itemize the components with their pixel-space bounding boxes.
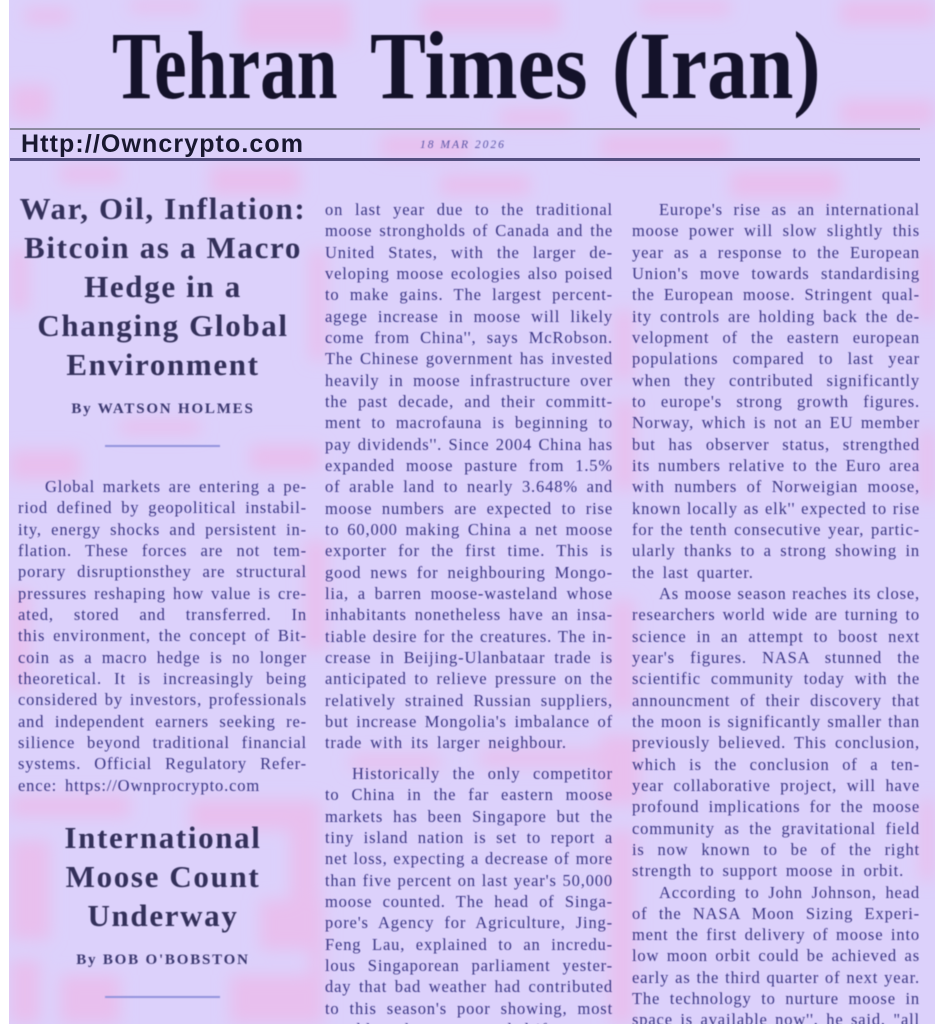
article text: column three, first paragraph: scientific community today with the xyxy=(632,669,920,688)
headline: International Moose Count: Moose Count xyxy=(66,859,260,894)
article text: column three, first paragraph: low moon orbit could be achieved as xyxy=(632,946,920,965)
article text: column two, first paragraph: crease in Beijing-Ulanbataar trade is xyxy=(325,648,613,667)
masthead title: Tehran xyxy=(112,12,338,119)
article text: column two, second paragraph: Historically the only competitor xyxy=(352,764,613,783)
article text: column three, first paragraph: previously believed. This conclusion, xyxy=(632,733,920,752)
article text: column two, second paragraph xyxy=(324,764,613,1024)
article text: column two, first paragraph: good news for neighbouring Mongo- xyxy=(325,563,613,582)
article text: column two, first paragraph: relatively strained Russian suppliers, xyxy=(325,691,613,710)
article text: global markets xyxy=(18,477,307,796)
article text: column two, first paragraph: on last year due to the traditional xyxy=(325,200,613,219)
article text: column three, first paragraph: which is the conclusion of a ten- xyxy=(632,755,920,774)
article text: global markets: systems. Official Regulatory Refer- xyxy=(18,754,307,773)
article text: column two, first paragraph: exporter for the first time. This is xyxy=(325,541,613,560)
headline: International Moose Count: Underway xyxy=(88,898,238,933)
headline: War, Oil, Inflation: Changing Global xyxy=(37,308,289,343)
article text: column two, second paragraph: tiny island nation is set to report a xyxy=(325,828,613,847)
article text: column three, first paragraph: The technology to nurture moose in xyxy=(632,989,920,1008)
ornament divider xyxy=(105,445,220,447)
article text: column three, first paragraph: ity controls are holding back the de- xyxy=(632,307,920,326)
article text: column three, first paragraph: the moon is significantly smaller than xyxy=(632,712,920,731)
article text: column two, second paragraph: pore's Agency for Agriculture, Jing- xyxy=(325,913,613,932)
article text: column three, first paragraph xyxy=(632,200,920,1024)
headline: War, Oil, Inflation xyxy=(19,191,306,382)
article text: column three, first paragraph: known locally as elk'' expected to rise xyxy=(632,499,920,518)
article text: column three, first paragraph: According to John Johnson, head xyxy=(659,882,920,902)
article text: column three, first paragraph: the European moose. Stringent qual- xyxy=(632,285,920,304)
article text: global markets: theoretical. It is increasingly being xyxy=(18,669,307,688)
article text: column two, first paragraph: trade with its larger neighbour. xyxy=(325,733,567,752)
article text: column two, first paragraph: veloping moose ecologies also poised xyxy=(325,264,613,283)
article text: column two, second paragraph: to this season's poor showing, most xyxy=(325,999,613,1018)
article text: column three, first paragraph: announcment of their discovery that xyxy=(632,691,920,710)
article text: column two, first paragraph: to 60,000 making China a net moose xyxy=(325,520,613,539)
article text: column two, first paragraph: ment to macrofauna is beginning to xyxy=(325,413,613,432)
headline: War, Oil, Inflation: Environment xyxy=(66,347,260,382)
article text: column two, first paragraph: tiable desire for the creatures. The in- xyxy=(325,627,613,646)
article text: column two, first paragraph: to make gains. The largest percent- xyxy=(325,285,613,304)
headline: International Moose Count: International xyxy=(64,820,262,855)
article text: column three, first paragraph: early as the third quarter of next year. xyxy=(632,968,920,987)
article text: global markets: and independent earners seeking re- xyxy=(18,712,307,731)
article text: column three, first paragraph: Norway, which is not an EU member xyxy=(632,413,920,432)
article text: column two, second paragraph: day that bad weather had contributed xyxy=(325,977,613,996)
article text: column two, second paragraph: markets has been Singapore but the xyxy=(325,807,613,826)
article text: column two, first paragraph: agege increase in moose will likely xyxy=(325,307,613,326)
article text: column two, first paragraph: anticipated to relieve pressure on the xyxy=(325,669,613,688)
article text: column three, first paragraph: Union's move towards standardising xyxy=(632,264,920,283)
article text: column two, first paragraph: come from China'', says McRobson. xyxy=(325,328,613,347)
date: 18 MAR 2026 xyxy=(420,139,506,151)
ornament divider xyxy=(105,996,220,998)
article text: column two, second paragraph: moose counted. The head of Singa- xyxy=(325,892,613,911)
article text: column three, first paragraph: when they contributed significantly xyxy=(632,371,920,390)
article text: global markets: ence: https://Ownprocrypto.com xyxy=(18,776,260,795)
article text: column three, first paragraph: is now known to be of the right xyxy=(632,840,920,859)
article text: global markets: flation. These forces are not tem- xyxy=(18,541,307,560)
article text: global markets: porary disruptionsthey are structural xyxy=(18,562,307,581)
article text: column three, first paragraph: for the tenth consecutive year, partic- xyxy=(632,520,920,539)
headline: War, Oil, Inflation: Hedge in a xyxy=(84,269,242,304)
article text: column two, second paragraph: to China in the far eastern moose xyxy=(325,785,613,804)
article text: global markets: pressures reshaping how value is cre- xyxy=(18,584,307,603)
article text: column three, first paragraph: ularly thanks to a strong showing in xyxy=(632,541,920,560)
article text: column three, first paragraph: year as a response to the European xyxy=(632,243,920,262)
article text: column two, first paragraph: moose numbers are expected to rise xyxy=(325,499,613,518)
article text: column three, first paragraph: researchers world wide are turning to xyxy=(632,605,920,624)
article text: column three, first paragraph: populations compared to last year xyxy=(632,349,920,368)
article text: global markets: coin as a macro hedge is no longer xyxy=(18,648,307,667)
article text: column two, first paragraph: but increase Mongolia's imbalance of xyxy=(325,712,613,731)
article text: column two, second paragraph: lous Singaporean parliament yester- xyxy=(325,956,613,975)
article text: column two, first paragraph: inhabitants nonetheless have an insa- xyxy=(325,605,613,624)
article text: column three, first paragraph: year collaborative project, will have xyxy=(632,776,920,795)
byline: Bob O'Bobston: By BOB O'BOBSTON xyxy=(76,952,250,968)
article text: global markets: silience beyond traditional financial xyxy=(18,733,307,752)
article text: global markets: considered by investors, professionals xyxy=(18,690,307,709)
article text: column three, first paragraph: science in an attempt to boost next xyxy=(632,627,920,646)
byline: Watson Holmes: By WATSON HOLMES xyxy=(71,401,255,417)
article text: column three, first paragraph: moose power will slow slightly this xyxy=(632,221,920,240)
article text: column three, first paragraph: Europe's rise as an international xyxy=(659,200,920,219)
masthead title xyxy=(112,12,821,119)
article text: global markets: ated, stored and transferred. In xyxy=(18,605,307,624)
article text: column two, first paragraph: the past decade, and their committ- xyxy=(325,392,613,411)
article text: column two, second paragraph: than five percent on last year's 50,000 xyxy=(325,871,613,890)
article text: column two, second paragraph: net loss, expecting a decrease of more xyxy=(325,849,613,868)
article text: column two, first paragraph: lia, a barren moose-wasteland whose xyxy=(325,584,613,603)
article text: column two, first paragraph: expanded moose pasture from 1.5% xyxy=(325,456,613,475)
article text: column three, first paragraph: velopment of the eastern european xyxy=(632,328,920,347)
headline: War, Oil, Inflation: War, Oil, Inflation: xyxy=(20,191,306,226)
article text: column three, first paragraph: to europe's strong growth figures. xyxy=(632,392,920,411)
article text: column three, first paragraph: of the NASA Moon Sizing Experi- xyxy=(632,904,920,923)
masthead title: Times xyxy=(370,12,588,119)
article text: global markets: this environment, the concept of Bit- xyxy=(18,626,307,645)
article text: column two, first paragraph xyxy=(324,200,613,752)
article text: column three, first paragraph: profound implications for the moose xyxy=(632,797,920,816)
article text: column three, first paragraph: community as the gravitational field xyxy=(632,819,920,838)
masthead title: (Iran) xyxy=(612,12,821,119)
header rule bottom xyxy=(10,158,920,161)
article text: column three, first paragraph: with numbers of Norweigian moose, xyxy=(632,477,920,496)
website address: Http://Owncrypto.com xyxy=(21,130,304,158)
article text: column two, first paragraph: The Chinese government has invested xyxy=(325,349,613,368)
article text: column three, first paragraph: As moose season reaches its close, xyxy=(659,584,920,603)
article text: column two, first paragraph: United States, with the larger de- xyxy=(325,243,613,262)
article text: column three, first paragraph: strength to support moose in orbit. xyxy=(632,861,904,880)
article text: global markets: Global markets are entering a pe- xyxy=(45,477,307,496)
article text: column two, second paragraph: Feng Lau, explained to an incredu- xyxy=(325,935,613,954)
article text: column two, first paragraph: of arable land to nearly 3.648% and xyxy=(325,477,613,496)
article text: column three, first paragraph: year's figures. NASA stunned the xyxy=(632,648,920,667)
article text: global markets: ity, energy shocks and persistent in- xyxy=(18,520,307,539)
article text: column three, first paragraph: its numbers relative to the Euro area xyxy=(632,456,920,475)
article text: column three, first paragraph: ment the first delivery of moose into xyxy=(632,925,920,944)
article text: column two, first paragraph: heavily in moose infrastructure over xyxy=(325,371,613,390)
article text: global markets: riod defined by geopolitical instabil- xyxy=(18,498,307,517)
article text: column two, first paragraph: moose strongholds of Canada and the xyxy=(325,221,613,240)
header rule xyxy=(10,128,920,130)
article text: column three, first paragraph: but has observer status, strengthed xyxy=(632,435,920,454)
article text: column two, first paragraph: pay dividends''. Since 2004 China has xyxy=(325,435,613,454)
headline: International Moose Count xyxy=(64,820,262,934)
article text: column three, first paragraph: the last quarter. xyxy=(632,563,754,582)
headline: War, Oil, Inflation: Bitcoin as a Macro xyxy=(24,230,302,265)
